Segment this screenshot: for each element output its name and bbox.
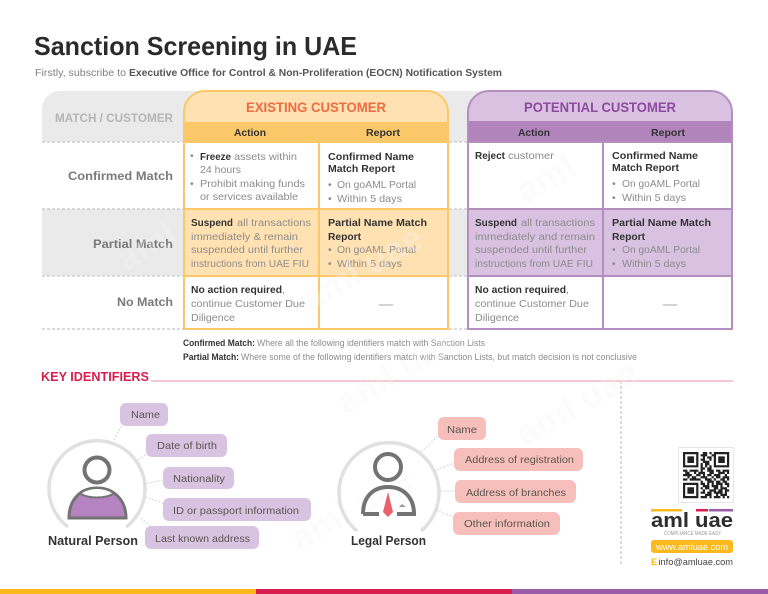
definitions note: Confirmed Match:	[183, 338, 255, 348]
email: info@amluae.com	[658, 557, 733, 568]
panel: existing customer: •	[328, 244, 332, 256]
watermarks	[108, 145, 645, 559]
watermarks: aml	[508, 145, 583, 212]
pill: name	[120, 403, 168, 426]
pill: date of birth	[146, 434, 227, 457]
panel: existing customer: Prohibit making funds	[200, 178, 305, 190]
panel: existing customer	[184, 91, 448, 330]
panel: potential customer: instructions from UAE FIU	[475, 258, 593, 270]
pill: address of branches: Address of branches	[466, 487, 566, 499]
logo: aml uae: aml uae	[651, 510, 733, 532]
pill: address of registration: Address of registration	[465, 454, 574, 466]
panel: potential customer: •	[612, 192, 616, 204]
panel: existing customer: continue Customer Due	[191, 298, 305, 310]
panel: potential customer: On goAML Portal	[622, 178, 700, 190]
panel: potential customer: continue Customer Due	[475, 298, 589, 310]
panel: existing customer: Diligence	[191, 312, 235, 324]
panel: existing customer: Confirmed Name	[328, 151, 414, 163]
natural person	[48, 403, 311, 549]
heading: key identifiers: KEY IDENTIFIERS	[41, 369, 149, 384]
pill: name: Name	[447, 424, 477, 436]
qr code	[678, 448, 734, 502]
watermarks: aml uae	[294, 216, 430, 319]
row labels: Partial Match	[93, 237, 173, 251]
panel: potential customer: •	[612, 178, 616, 190]
watermarks: aml uae	[284, 456, 420, 559]
panel: existing customer: On goAML Portal	[337, 179, 416, 191]
panel: existing customer: ,	[282, 284, 285, 296]
pill: address of branches	[455, 480, 576, 503]
row labels: MATCH / CUSTOMER	[55, 111, 173, 125]
panel: existing customer: assets within	[234, 151, 297, 163]
panel: existing customer: immediately & remain	[191, 231, 298, 243]
panel: potential customer: suspended until further	[475, 244, 588, 256]
panel: potential customer: all transactions	[521, 217, 595, 229]
definitions note	[183, 338, 637, 362]
panel: existing customer: Freeze	[200, 151, 231, 163]
panel: existing customer: Report	[366, 127, 400, 139]
subtitle: Executive Office for Control & Non-Proliferation (EOCN) Notification System	[129, 68, 502, 79]
panel: existing customer: •	[190, 178, 194, 190]
row labels	[55, 111, 173, 309]
panel: existing customer: all transactions	[237, 217, 311, 229]
panel: potential customer	[468, 91, 732, 330]
pill: nationality: Nationality	[173, 473, 226, 485]
panel: potential customer: Within 5 days	[622, 258, 686, 270]
panel: existing customer: instructions from UAE FIU	[191, 258, 309, 270]
pill: id or passport	[163, 498, 311, 521]
pill: last known address	[145, 526, 259, 549]
panel: potential customer: Report	[651, 127, 685, 139]
panel: existing customer: Report	[328, 231, 361, 243]
panel: existing customer: or services available	[200, 191, 298, 203]
panel: potential customer: •	[612, 244, 616, 256]
panel: potential customer: Confirmed Name	[612, 150, 698, 162]
row labels: No Match	[117, 295, 173, 309]
definitions note: Where all the following identifiers match with Sanction Lists	[257, 338, 485, 348]
title: Sanction Screening in UAE	[34, 31, 357, 61]
panel: potential customer: Action	[518, 127, 550, 139]
panel: potential customer: Suspend	[475, 217, 517, 229]
icon: natural person	[49, 425, 163, 528]
icon: legal person	[339, 436, 455, 531]
panel: potential customer: Diligence	[475, 312, 519, 324]
pill: name	[438, 417, 486, 440]
subtitle: Firstly, subscribe to	[35, 68, 126, 79]
panel: potential customer: customer	[508, 150, 555, 162]
watermarks: aml	[108, 212, 183, 279]
panel: potential customer: Reject	[475, 150, 505, 162]
panel: existing customer: •	[328, 258, 332, 270]
panel: existing customer: •	[190, 150, 194, 162]
panel: potential customer: •	[612, 258, 616, 270]
pill: last known address: Last known address	[155, 533, 250, 545]
pill: address of registration	[454, 448, 583, 471]
panel: existing customer: Action	[234, 127, 266, 139]
panel: existing customer: Suspend	[191, 217, 233, 229]
pill: date of birth: Date of birth	[157, 440, 217, 452]
website button: www.amluae.com	[655, 542, 728, 553]
panel: potential customer: immediately and remain	[475, 231, 595, 243]
watermarks: aml uae	[328, 319, 465, 422]
panel: existing customer: No action required	[191, 284, 282, 296]
panel: existing customer: Match Report	[328, 163, 395, 175]
panel: potential customer: ,	[566, 284, 569, 296]
panel: existing customer: •	[328, 179, 332, 191]
panel: potential customer: Match Report	[612, 162, 679, 174]
natural person label: Natural Person	[48, 534, 138, 548]
panel: potential customer: POTENTIAL CUSTOMER	[524, 99, 676, 115]
definitions note: Partial Match:	[183, 352, 239, 362]
logo: aml uae: COMPLIANCE MADE EASY	[664, 531, 722, 537]
row labels: Confirmed Match	[68, 169, 173, 183]
legal person label: Legal Person	[351, 534, 426, 548]
panel: existing customer: 24 hours	[200, 164, 241, 176]
panel: potential customer: Report	[612, 231, 645, 243]
panel: potential customer: On goAML Portal	[622, 244, 700, 256]
panel: existing customer: EXISTING CUSTOMER	[246, 99, 386, 115]
panel: existing customer: On goAML Portal	[337, 244, 416, 256]
panel: existing customer: •	[328, 193, 332, 205]
watermarks: aml uae	[508, 351, 645, 454]
email: E	[651, 557, 657, 568]
pill: other information	[453, 512, 560, 535]
panel: existing customer: Partial Name Match	[328, 217, 427, 229]
panel: existing customer: Within 5 days	[337, 258, 402, 270]
pill: other information: Other information	[464, 518, 550, 530]
panel: potential customer: Partial Name Match	[612, 217, 711, 229]
pill: nationality	[163, 467, 234, 489]
panel: potential customer: Within 5 days	[622, 192, 686, 204]
panel: existing customer: Within 5 days	[337, 193, 402, 205]
panel: potential customer: No action required	[475, 284, 566, 296]
bottom colour bar	[0, 589, 768, 594]
pill: id or passport: ID or passport information	[173, 505, 299, 517]
panel: existing customer: suspended until further	[191, 244, 304, 256]
legal person	[339, 417, 583, 548]
definitions note: Where some of the following identifiers match with Sanction Lists, but match decision is not conclusive	[241, 352, 637, 362]
pill: name: Name	[131, 409, 160, 421]
table background bands	[42, 91, 490, 329]
